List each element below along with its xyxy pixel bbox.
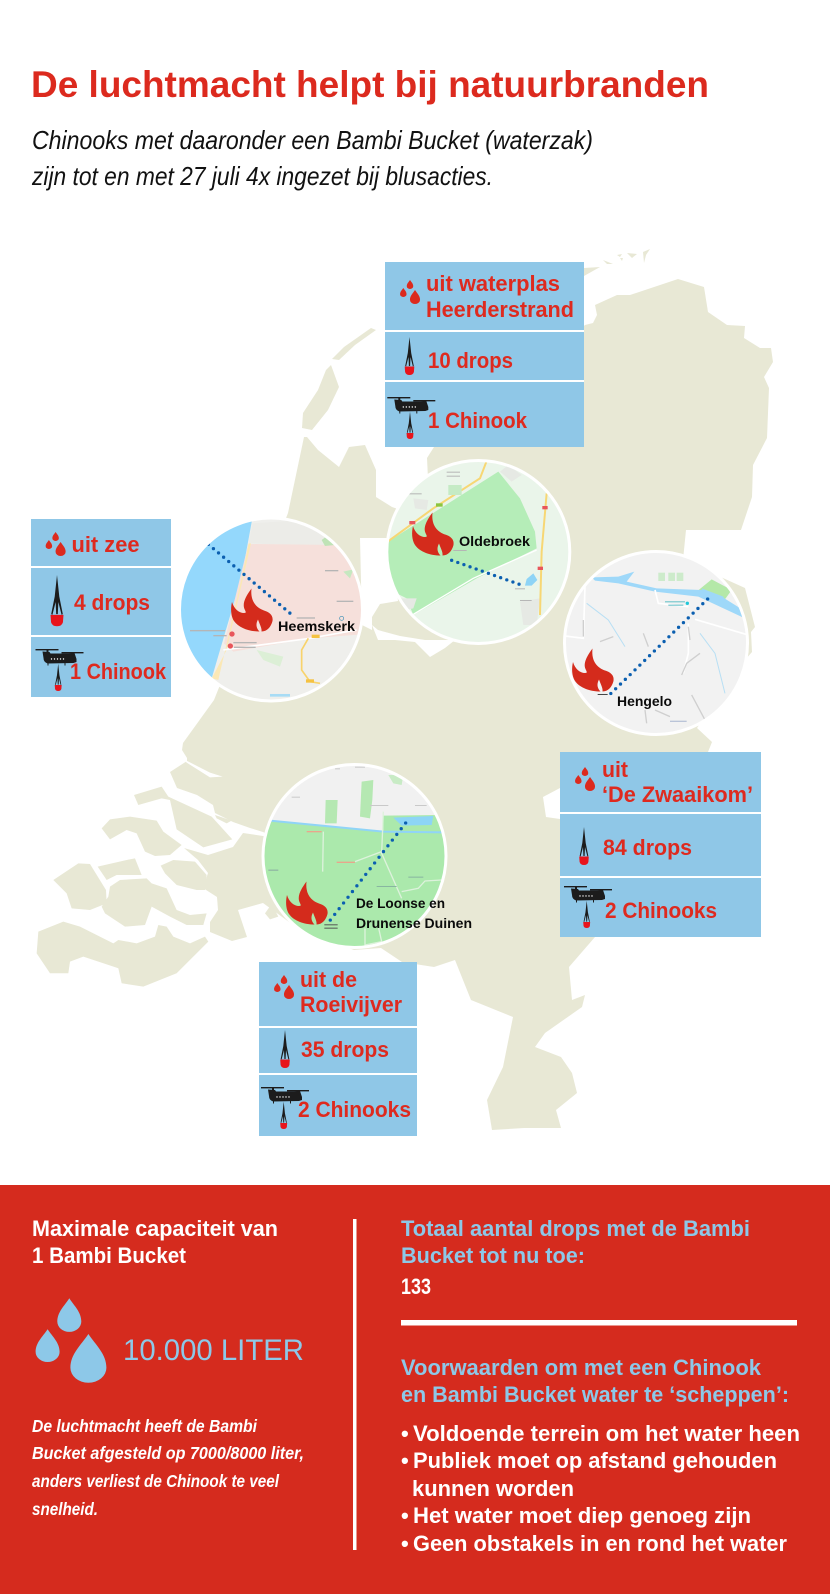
label: De Loonse en Drunense Duinen: Drunense Duinen [356, 915, 472, 931]
label: Oldebroek: Oldebroek [459, 533, 530, 549]
panel: bottom red section [0, 1185, 830, 1594]
heading: total drops: Bucket tot nu toe: [401, 1243, 585, 1268]
heading: conditions [401, 1355, 789, 1407]
text: drops count: 35 drops [301, 1037, 389, 1062]
flame: De Loonse en Drunense Duinen [286, 882, 328, 924]
divider [353, 1219, 356, 1550]
map of the Netherlands [37, 249, 773, 1130]
list: conditions: Het water moet diep genoeg zijn [413, 1503, 751, 1528]
text: chinook count: 1 Chinook [428, 408, 528, 433]
panel: Roeivijver [259, 962, 417, 1136]
map circle: Oldebroek [386, 459, 572, 645]
text: chinook count: 2 Chinooks [298, 1097, 411, 1122]
number: total drops: 133 [401, 1274, 431, 1299]
icon: chinook with bucket [36, 649, 84, 691]
list: conditions: Voldoende terrein om het water heen [413, 1421, 800, 1446]
text: source: uit [602, 757, 629, 782]
text: drops count: 84 drops [603, 835, 692, 860]
label: De Loonse en Drunense Duinen [356, 895, 472, 931]
text: source: uit de [300, 967, 357, 992]
heading: capacity: 1 Bambi Bucket [32, 1243, 187, 1268]
heading: capacity [32, 1216, 278, 1268]
text: italic note: anders verliest de Chinook te veel [32, 1471, 280, 1491]
text: italic note: De luchtmacht heeft de Bambi [32, 1416, 258, 1436]
panel: uit zee [31, 519, 171, 697]
title: De luchtmacht helpt bij natuurbranden [31, 64, 709, 105]
list: conditions: • [401, 1448, 409, 1473]
subtitle [31, 125, 593, 191]
list: conditions: kunnen worden [412, 1476, 574, 1501]
map circle: Heemskerk [181, 518, 362, 702]
icon: bucket [51, 575, 63, 626]
text: source: uit waterplas [426, 271, 560, 296]
text: chinook count: 2 Chinooks [605, 898, 717, 923]
list: conditions: • [401, 1531, 409, 1556]
list: conditions: • [401, 1503, 409, 1528]
heading: total drops [401, 1216, 750, 1268]
text: source [426, 271, 574, 322]
list: conditions: Geen obstakels in en rond het water [413, 1531, 787, 1556]
text: italic note: Bucket afgesteld op 7000/8000 liter, [32, 1443, 304, 1463]
panel: De Zwaaikom [560, 752, 761, 937]
icon: water drops [46, 532, 66, 556]
icon: water drops [274, 975, 294, 999]
icon: chinook with bucket [564, 886, 612, 928]
icon: chinook with bucket [261, 1087, 309, 1129]
text: drops count: 10 drops [428, 348, 513, 373]
subtitle: Chinooks met daaronder een Bambi Bucket (waterzak) [32, 125, 593, 155]
list: conditions: Publiek moet op afstand gehouden [413, 1448, 777, 1473]
flame: Heemskerk [231, 588, 273, 632]
icon: large water drops [36, 1298, 106, 1383]
label: De Loonse en Drunense Duinen: De Loonse en [356, 895, 445, 911]
heading: capacity: Maximale capaciteit van [32, 1216, 278, 1241]
flame: Oldebroek [412, 512, 454, 556]
icon: water drops [575, 767, 595, 791]
map circle: De Loonse en Drunense Duinen [262, 763, 448, 949]
subtitle: zijn tot en met 27 juli 4x ingezet bij blusacties. [31, 161, 493, 191]
heading: total drops: Totaal aantal drops met de Bambi [401, 1216, 750, 1241]
divider [401, 1320, 797, 1326]
heading: conditions: en Bambi Bucket water te ‘scheppen’: [401, 1382, 789, 1407]
text: source: Heerderstrand [426, 297, 574, 322]
list: conditions: • [401, 1421, 409, 1446]
text: source: ‘De Zwaaikom’ [602, 782, 753, 807]
text: drops count: 4 drops [74, 590, 150, 615]
text: chinook count: 1 Chinook [70, 659, 167, 684]
text: source: Roeivijver [300, 992, 402, 1017]
list: conditions [401, 1421, 800, 1556]
icon: bucket [405, 337, 414, 375]
text: italic note [32, 1416, 304, 1519]
text: source [602, 757, 753, 807]
label: Hengelo: Hengelo [617, 693, 672, 709]
text: source [300, 967, 402, 1017]
text: 10.000 liter: 10.000 LITER [123, 1334, 304, 1367]
heading: conditions: Voorwaarden om met een Chinook [401, 1355, 762, 1380]
icon: bucket [280, 1030, 290, 1068]
label: Heemskerk: Heemskerk [278, 618, 355, 634]
icon: bucket [579, 827, 589, 865]
text: source: uit zee [72, 532, 140, 557]
text: italic note: snelheid. [32, 1499, 98, 1519]
icon: chinook with bucket [387, 397, 435, 439]
flame: Hengelo [572, 648, 614, 692]
panel: Heerderstrand [385, 262, 584, 447]
map circle: Hengelo [563, 550, 749, 736]
icon: water drops [400, 280, 420, 304]
